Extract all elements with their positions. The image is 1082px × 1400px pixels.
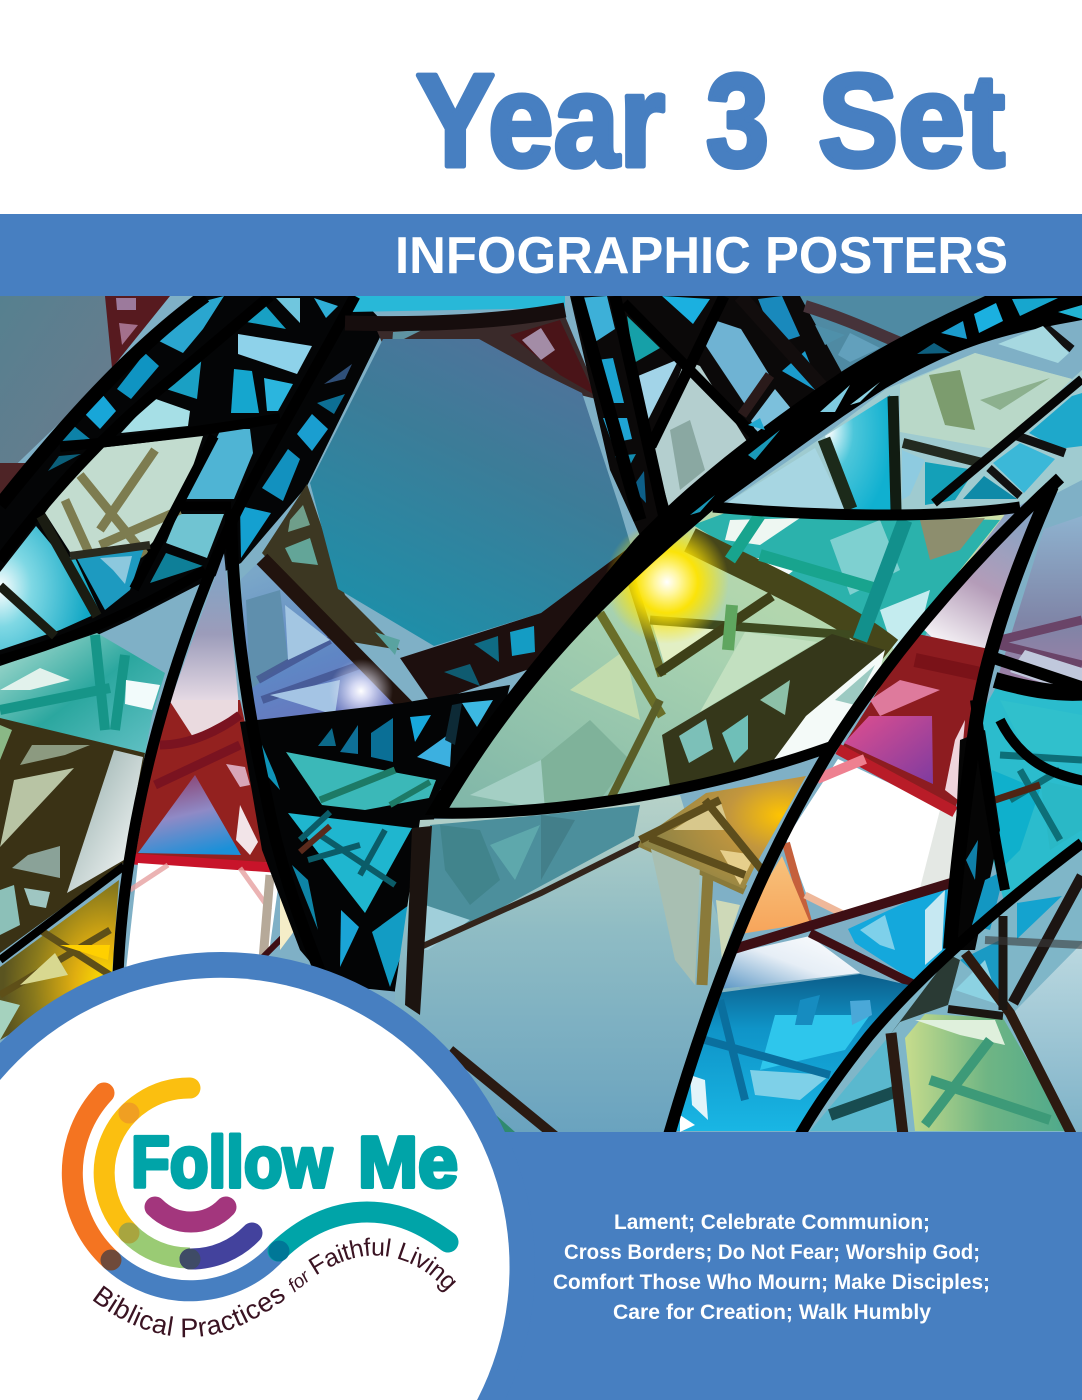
window: white hexagon right [786,749,960,929]
window: upper right large [727,353,1082,512]
wave: teal [278,1212,448,1251]
strip: top centre cyan [352,296,541,312]
wave: blue [111,1251,278,1291]
logo circle: white disc [0,978,510,1400]
window: pale blue white lower [720,936,860,989]
window: large sage and teal centre [435,510,1020,812]
text block: poster topics: Cross Borders; Do Not Fear; Worship God; [564,1241,980,1264]
window: white lower left [126,863,295,970]
title [416,47,1005,194]
band: dark centre with blue cells [240,685,510,992]
frame: dark red upper left [0,296,170,500]
cells: upper left blue fragments [48,296,352,583]
title: 3 [706,47,769,194]
lattice: olive struts from yellow light [600,515,905,800]
window: top right grey blue [800,296,985,372]
window: lower centre pale blue [395,795,745,1136]
logo tagline: Biblical Practices for Faithful Living [92,1238,456,1338]
bar: dark diagonal under hexagon [262,559,410,710]
smile: magenta [155,1207,226,1222]
panel: stained glass artwork [0,296,1082,1136]
logo wordmark: Me [358,1123,458,1203]
subtitle text: INFOGRAPHIC POSTERS [395,227,1008,285]
text block: poster topics: Care for Creation; Walk Humbly [613,1301,931,1324]
arc: green [129,1233,190,1258]
bar: dark red diagonals [734,883,951,986]
overlap dots [100,1102,290,1270]
arc: indigo [190,1233,252,1259]
logo circle: blue ring [0,952,535,1400]
window: lavender right [999,516,1082,696]
bars: lower right dark struts [889,876,1082,1135]
window: gold centre right [640,776,806,889]
subtitle banner [0,214,1082,296]
window: upper centre hexagon [310,339,631,646]
logo wordmark [131,1123,458,1203]
footer panel: blue block [0,1132,1082,1400]
window: olive lower left [0,718,145,953]
frame: top of hexagon [375,316,600,400]
window: pale purple right [924,502,1033,648]
window: right teal cluster [950,680,1082,950]
bar: red horizontal [134,859,272,868]
window: teal lower left [0,633,165,755]
window: lower right [803,843,1082,1132]
text block: poster topics: Lament; Celebrate Communion; [614,1211,930,1234]
window: violet blue centre [241,564,394,720]
window: cyan centre panel [288,812,412,987]
logo: Follow Me [62,1078,458,1338]
window: top centre dark lattice [564,296,842,534]
window: pale lavender sliver [172,553,238,700]
text block: poster topics [553,1211,990,1324]
window: teal centre panel [286,752,436,810]
title: Set [818,47,1005,194]
window: sage left [45,436,203,555]
window: red right [841,633,989,809]
window: gold lower left [0,880,119,1040]
window: bright blue lower [672,974,913,1132]
window: top left grey [0,296,120,480]
arc: yellow [104,1088,190,1233]
window: blue right of peach [848,883,948,983]
bars: upper right window [824,326,1082,510]
arc: orange [72,1093,111,1260]
window: cyan left [0,526,145,650]
band: brown ladder centre [400,550,628,699]
lattice: dark olive lower [662,632,885,787]
leads: black outlines [0,296,1082,1135]
frame: olive left of hexagon [262,484,400,655]
logo wordmark: Follow [131,1123,333,1203]
text block: poster topics: Comfort Those Who Mourn; Make Disciples; [553,1271,990,1294]
flare: yellow light [605,520,729,644]
title: Year [416,47,665,194]
window: peach orange [744,856,809,934]
window: red and purple centre left [134,700,275,862]
window: dark band upper left [0,296,386,680]
flare: white light [332,660,392,710]
band: large black arc [425,296,1082,815]
